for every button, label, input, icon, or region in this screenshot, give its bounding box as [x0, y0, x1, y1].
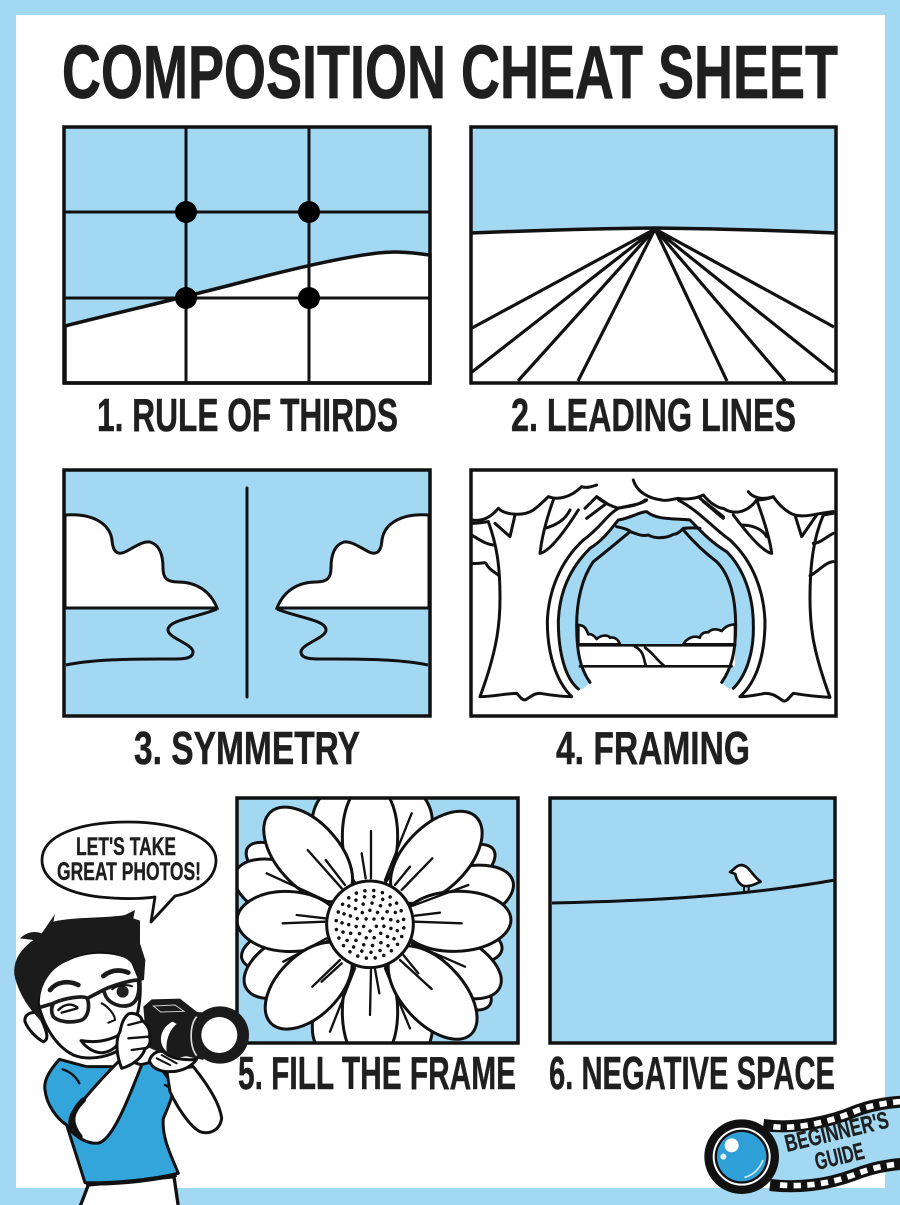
photographer character — [14, 910, 249, 1205]
horizon — [471, 228, 836, 233]
panel 5: fill the frame — [235, 796, 520, 1045]
lens ring — [191, 1006, 249, 1064]
label 4: 4. FRAMING — [556, 722, 750, 774]
sky — [471, 127, 836, 233]
panel 2: leading lines — [471, 127, 836, 383]
smile — [81, 1034, 121, 1053]
waistband — [86, 1175, 177, 1184]
eyebrows — [50, 970, 128, 990]
top perforations — [763, 1102, 900, 1126]
seed dots — [334, 888, 406, 960]
barrel highlight — [161, 1022, 177, 1052]
speech bubble — [42, 822, 216, 922]
bubble text — [57, 833, 201, 886]
panel 4: framing — [471, 470, 836, 716]
supporting hand — [149, 1051, 197, 1072]
right tree — [740, 515, 830, 701]
axis of symmetry — [246, 488, 248, 697]
glasses — [40, 980, 139, 1022]
left cloud — [65, 515, 217, 608]
flower centre — [327, 881, 413, 968]
blue arch and sky — [558, 512, 753, 689]
thirds grid — [64, 127, 430, 383]
side branches — [472, 513, 833, 576]
right arm — [167, 1067, 222, 1133]
lens barrel — [161, 1012, 213, 1060]
left shore — [66, 609, 217, 665]
wire — [552, 880, 835, 903]
midground band — [578, 645, 735, 666]
canopy scallops — [617, 527, 700, 538]
nose — [102, 1003, 115, 1023]
film strip base — [763, 1101, 900, 1186]
petal vein lines — [267, 813, 468, 1032]
bottom perforations — [770, 1164, 900, 1186]
panel 6: negative space — [550, 798, 835, 1043]
panel 1: rule of thirds — [64, 127, 430, 383]
left tree — [480, 522, 572, 700]
label 3: 3. SYMMETRY — [134, 722, 360, 774]
foreground ground — [583, 668, 728, 689]
back petals — [236, 782, 506, 1068]
converging lines — [472, 229, 834, 381]
lens rim line — [191, 1017, 197, 1056]
trousers — [80, 1177, 178, 1205]
hand lines — [157, 1055, 177, 1065]
raised hand — [117, 1013, 150, 1068]
bird — [730, 865, 761, 893]
badge text — [782, 1107, 891, 1176]
hair — [14, 910, 145, 1022]
open eye — [112, 985, 133, 998]
face — [38, 952, 140, 1058]
bubble text: LET'S TAKE — [76, 833, 176, 861]
middle petals — [225, 846, 521, 1013]
beginner's guide badge — [704, 1101, 900, 1194]
label 5: 5. FILL THE FRAME — [238, 1047, 516, 1099]
right cloud — [277, 515, 429, 608]
hill — [65, 252, 430, 383]
viewfinder — [153, 1005, 184, 1012]
ear — [25, 1012, 47, 1042]
front petals — [236, 782, 512, 1067]
shirt — [45, 1059, 178, 1183]
distant bushes and ground — [578, 624, 735, 644]
badge text: GUIDE — [812, 1138, 867, 1176]
left arm — [70, 1058, 142, 1143]
power points — [175, 201, 320, 309]
lens glass — [201, 1017, 237, 1053]
lens badge — [704, 1119, 779, 1194]
arch lines — [577, 530, 736, 682]
label 1: 1. RULE OF THIRDS — [97, 389, 398, 441]
right shore — [277, 609, 428, 665]
panel 3: symmetry — [64, 470, 430, 716]
finger lines — [128, 1022, 148, 1050]
winking eye — [58, 1005, 77, 1013]
sleeve cuff — [73, 1100, 83, 1137]
camera body — [143, 999, 203, 1058]
bubble text: GREAT PHOTOS! — [57, 858, 201, 886]
sleeve crease — [63, 1069, 173, 1090]
